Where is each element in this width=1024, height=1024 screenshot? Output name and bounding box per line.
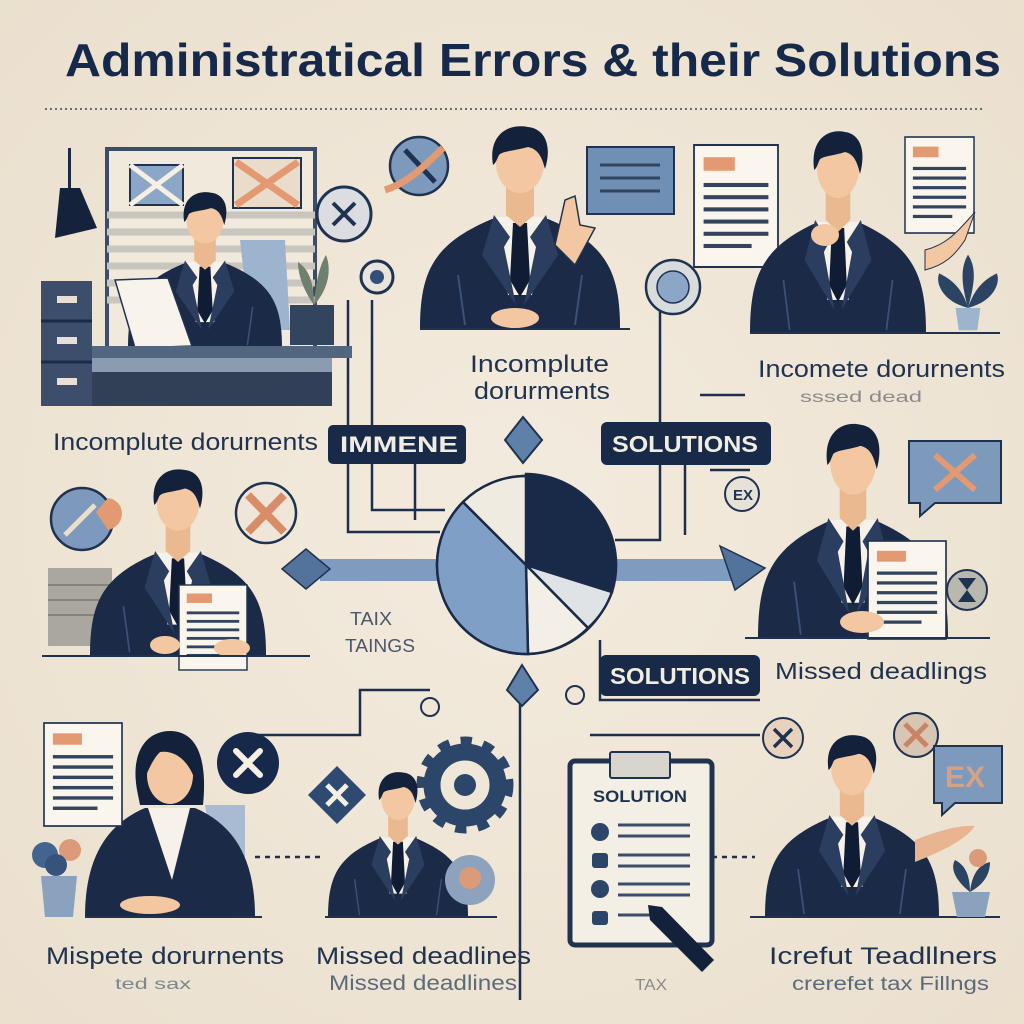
desk	[92, 346, 352, 406]
document top-left of woman	[44, 723, 122, 826]
label: mispete documents: ted sax	[115, 976, 191, 993]
icon: wrench badge	[51, 488, 122, 550]
label: tax tainings: TAINGS	[345, 636, 415, 656]
hand at chin	[811, 224, 839, 246]
panel: explaining person	[420, 126, 630, 329]
label: mispete documents: Mispete dorurnents	[46, 943, 284, 970]
title rule	[45, 108, 985, 110]
icon: small location badges	[421, 686, 584, 716]
tag: immense: IMMENE	[340, 432, 458, 457]
paper held	[115, 278, 192, 348]
speech bubble EX	[934, 746, 1002, 815]
label: missed deadlines bottom: Missed deadlines	[316, 943, 531, 970]
label: incomplete documents top: dorurments	[474, 378, 610, 405]
speech bubble with x	[909, 441, 1001, 516]
icon: pen	[648, 905, 714, 972]
label: careful tax filings	[769, 943, 997, 995]
flower pot right	[952, 849, 990, 917]
label: tax small: TAX	[635, 977, 667, 994]
raised hand	[555, 196, 595, 265]
panel: office desk scene	[41, 148, 352, 406]
label: careful tax filings: crerefet tax Fillngs	[792, 974, 989, 995]
desk line	[420, 328, 630, 330]
pie chart	[437, 474, 616, 654]
hand gesture	[925, 212, 975, 270]
icon: small ring	[361, 261, 393, 293]
blue arrow bars	[282, 546, 765, 590]
icon: x badge top right	[894, 713, 938, 757]
panel: clipboard solution	[570, 752, 712, 945]
panel: person with document left	[42, 469, 310, 670]
open hand	[915, 826, 975, 862]
icon: small document badge	[725, 477, 759, 511]
hands	[150, 636, 180, 654]
desk line	[745, 637, 990, 639]
icon: hourglass	[947, 570, 987, 610]
chair	[205, 805, 245, 860]
potted plant	[290, 255, 334, 345]
label: mispete documents	[46, 943, 284, 993]
label: tax tainings	[345, 609, 415, 656]
icon: emblem badge	[646, 260, 700, 314]
speech bubble EX: EX	[945, 761, 985, 794]
panel: person with gear	[325, 772, 497, 917]
tag: solutions lower	[600, 655, 760, 696]
paper stack	[48, 568, 112, 646]
icon: orange x badge	[236, 483, 296, 543]
hair back	[135, 731, 204, 805]
tag: immense	[328, 425, 466, 464]
label: incomplete documents top: Incomplute	[470, 351, 609, 378]
label: right top: Incomete dorurnents	[758, 356, 1005, 383]
icon: diamond x badge	[308, 766, 366, 824]
woman body	[85, 808, 255, 917]
potted plant	[938, 255, 998, 330]
label: missed deadlines bottom	[316, 943, 531, 995]
clipboard heading: SOLUTION	[593, 787, 687, 806]
tag: solutions upper	[601, 422, 771, 465]
label: incomplete documents top	[470, 351, 610, 405]
panel: thinking person	[750, 131, 1000, 333]
panel: person with document right	[745, 424, 990, 639]
flower pot	[32, 839, 81, 917]
icon: small document badge: EX	[733, 487, 753, 504]
window with envelopes	[107, 149, 315, 349]
document	[868, 541, 946, 639]
desk line	[750, 332, 1000, 334]
label: right top	[758, 356, 1005, 406]
label: left: Incomplute dorurnents	[53, 429, 318, 456]
icon: lower diamond	[507, 665, 538, 706]
label: missed deadlines bottom: Missed deadlines	[329, 972, 517, 995]
label: careful tax filings: Icrefut Teadllners	[769, 943, 997, 970]
document	[179, 585, 247, 670]
icon: x badge dark	[217, 732, 279, 794]
person at desk	[128, 192, 282, 348]
checklist rows	[591, 823, 690, 925]
title: Administratical Errors & their Solutions	[65, 34, 1001, 86]
desk lamp	[55, 148, 97, 238]
connector lines	[240, 300, 760, 1000]
panel: woman with document	[85, 731, 262, 917]
tag: solutions upper: SOLUTIONS	[612, 431, 758, 457]
panel: person gesturing bottom-right	[750, 735, 1000, 917]
orange gear detail	[445, 855, 495, 905]
tag: solutions lower: SOLUTIONS	[610, 663, 750, 689]
desk line	[42, 655, 310, 657]
filing cabinet	[41, 281, 92, 406]
icon: crossed tools badge	[385, 137, 448, 195]
icon: error badge	[317, 187, 371, 241]
label: tax tainings: TAIX	[350, 609, 392, 629]
label: missed deadlines right: Missed deadlings	[775, 658, 987, 684]
hands on desk	[491, 308, 539, 328]
icon: gear	[422, 742, 508, 828]
chair	[240, 240, 290, 330]
hand	[840, 611, 884, 633]
label: right top: sssed dead	[800, 389, 922, 406]
icon: orange x badge small	[763, 718, 803, 758]
icon: diamond marker	[505, 417, 542, 463]
note card	[587, 147, 674, 214]
document	[694, 145, 778, 267]
document in hand	[905, 137, 974, 233]
